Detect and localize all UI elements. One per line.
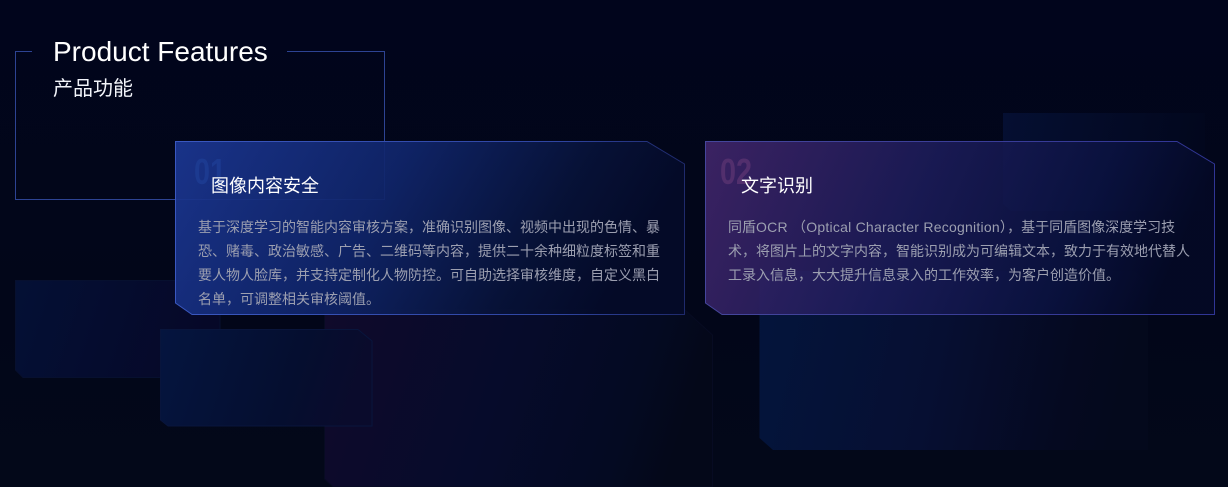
panel: background left lower	[160, 330, 372, 426]
card heading: 文字识别	[741, 176, 813, 196]
title: Product Features	[53, 36, 268, 67]
card body text: 基于深度学习的智能内容审核方案，准确识别图像、视频中出现的色情、暴	[198, 219, 660, 235]
panel: background right upper	[1003, 113, 1205, 211]
number 02: 02	[720, 151, 752, 192]
card: image content safety	[175, 141, 685, 315]
card heading: 图像内容安全	[211, 176, 319, 196]
card body text: 同盾OCR （Optical Character Recognition），基于同盾图像深度学习技	[728, 219, 1175, 235]
number 01: 01	[194, 151, 226, 192]
card body text: 恐、赌毒、政治敏感、广告、二维码等内容，提供二十余种细粒度标签和重	[198, 243, 660, 259]
card body text: 名单，可调整相关审核阈值。	[198, 291, 380, 307]
card body text	[198, 219, 660, 307]
card: text recognition	[705, 141, 1215, 315]
panel: background center	[324, 310, 712, 487]
card body text: 要人物人脸库，并支持定制化人物防控。可自助选择审核维度，自定义黑白	[198, 267, 660, 283]
title frame	[15, 51, 385, 200]
card body text: 术，将图片上的文字内容，智能识别成为可编辑文本，致力于有效地代替人	[728, 243, 1190, 259]
panel: background right lower	[760, 271, 1148, 450]
card body text: 工录入信息，大大提升信息录入的工作效率，为客户创造价值。	[728, 267, 1120, 283]
subtitle: 产品功能	[53, 78, 133, 100]
card body text	[728, 219, 1190, 283]
panel: background left	[16, 280, 220, 378]
